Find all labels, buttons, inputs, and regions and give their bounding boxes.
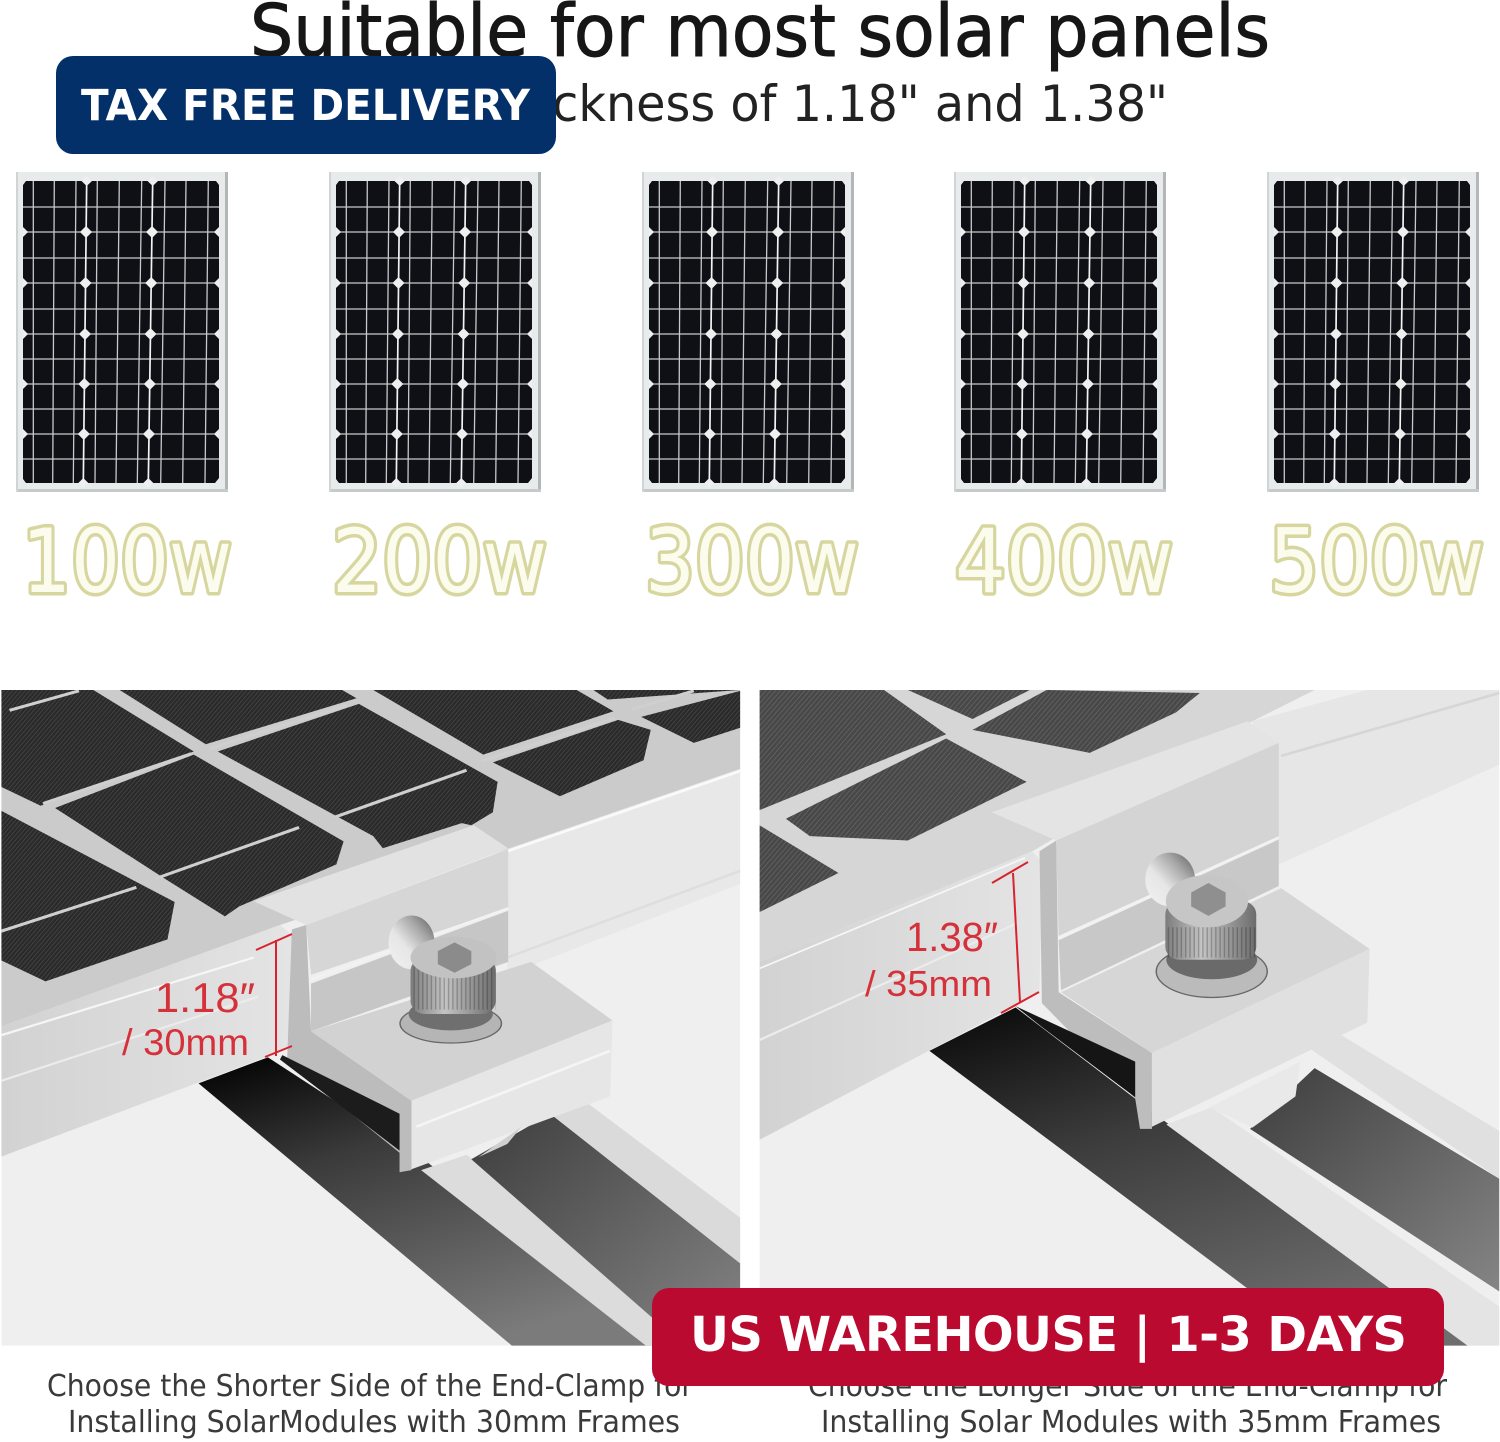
busbars	[0, 691, 694, 932]
dimension line 30mm	[256, 934, 292, 1057]
solar cells	[760, 690, 1200, 912]
caption: 30mm frames	[47, 1369, 694, 1440]
end clamp	[1039, 840, 1152, 1129]
solar panel 400w	[954, 172, 1166, 492]
caption: 35mm frames: Installing Solar Modules with 35mm Frames	[821, 1405, 1441, 1440]
caption: 35mm frames	[808, 1369, 1448, 1440]
panel glass surface	[760, 690, 1315, 962]
frame right section	[1252, 690, 1499, 864]
dimension text 1.18 inch: 1.18″	[155, 974, 255, 1021]
solar panel 500w	[1267, 172, 1479, 492]
row of solar panels	[16, 172, 1479, 492]
mounting rail	[199, 1057, 656, 1346]
caption: 30mm frames: Installing SolarModules with 30mm Frames	[68, 1405, 680, 1440]
dimension text 30mm: / 30mm	[122, 1022, 249, 1063]
badge: tax free delivery: TAX FREE DELIVERY	[81, 81, 531, 131]
bolt	[1156, 875, 1267, 997]
solar cells	[0, 690, 740, 981]
caption: 35mm frames: Choose the Longer Side of the End-Clamp for	[808, 1369, 1448, 1404]
caption: 30mm frames: Choose the Shorter Side of the End-Clamp for	[47, 1369, 694, 1404]
bolt	[400, 937, 501, 1043]
badge: us warehouse	[652, 1288, 1444, 1386]
clamp hole	[389, 915, 434, 969]
solar panel 300w	[642, 172, 854, 492]
frame front face	[0, 925, 293, 1157]
dimension line 35mm	[992, 862, 1039, 1013]
frame front face	[760, 851, 1042, 1140]
label 100w: 100w	[22, 510, 232, 613]
end clamp	[287, 925, 412, 1172]
label 300w: 300w	[645, 510, 859, 613]
photo: 30mm frame with end clamp	[0, 690, 740, 1346]
dimension text 1.38 inch: 1.38″	[906, 914, 998, 960]
subtitle: With a thickness of 1.18" and 1.38"	[322, 75, 1168, 133]
label 400w: 400w	[955, 510, 1173, 613]
panel glass surface	[0, 690, 740, 1027]
mounting rail	[929, 1007, 1468, 1346]
dimension text 35mm: / 35mm	[865, 963, 992, 1004]
wattage labels	[22, 510, 1484, 613]
photo: 35mm frame with end clamp	[760, 690, 1499, 1346]
badge: us warehouse: US WAREHOUSE | 1-3 DAYS	[690, 1307, 1407, 1363]
solar panel 200w	[329, 172, 541, 492]
clamp hole	[1145, 853, 1195, 906]
badge: tax free delivery	[56, 56, 556, 154]
label 200w: 200w	[332, 510, 547, 613]
solar panel 100w	[16, 172, 228, 492]
